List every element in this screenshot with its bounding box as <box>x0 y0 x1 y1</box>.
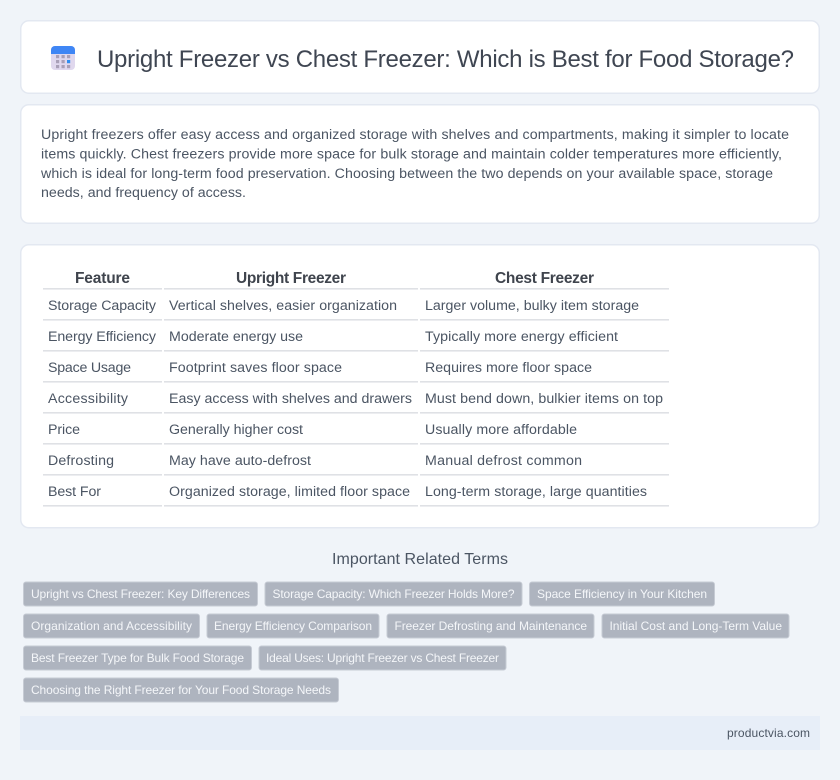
tag <box>265 582 522 606</box>
tag: Ideal Uses: Upright Freezer vs Chest Freezer <box>266 651 499 665</box>
table header: Chest Freezer <box>495 270 594 287</box>
row: storage capacity: Storage Capacity <box>48 298 157 314</box>
tag: Upright vs Chest Freezer: Key Differences <box>31 587 250 601</box>
tag: Best Freezer Type for Bulk Food Storage <box>31 651 244 665</box>
row: storage capacity <box>48 298 639 314</box>
tag <box>24 678 338 702</box>
title: Upright Freezer vs Chest Freezer: Which is Best for Food Storage? <box>97 46 794 73</box>
intro text: which is ideal for long-term food preservation. Choosing between the two depends on your available space, storage <box>40 166 773 182</box>
row: storage capacity: Vertical shelves, easier organization <box>169 298 397 314</box>
row: energy efficiency: Moderate energy use <box>169 329 303 345</box>
row: energy efficiency <box>48 329 618 345</box>
row: space usage: Requires more floor space <box>425 360 592 376</box>
tag: Energy Efficiency Comparison <box>214 619 372 633</box>
tag: Initial Cost and Long-Term Value <box>610 619 782 633</box>
row: defrosting: Defrosting <box>48 453 114 469</box>
intro text: items quickly. Chest freezers provide more space for bulk storage and maintain colder temperatures more efficiently, <box>41 146 782 162</box>
row: accessibility: Easy access with shelves and drawers <box>169 391 412 407</box>
row: defrosting: Manual defrost common <box>425 453 582 469</box>
tag <box>530 582 714 606</box>
table header: Feature <box>75 270 130 287</box>
tag: Organization and Accessibility <box>31 619 192 633</box>
row: space usage: Footprint saves floor space <box>169 360 342 376</box>
tag <box>24 646 252 670</box>
tag: Space Efficiency in Your Kitchen <box>537 587 707 601</box>
intro text: Upright freezers offer easy access and organized storage with shelves and compartments, making it simpler to locate <box>41 127 789 143</box>
table header <box>75 270 594 287</box>
tag <box>387 614 594 638</box>
tag <box>602 614 789 638</box>
row: storage capacity: Larger volume, bulky item storage <box>425 298 639 314</box>
tag: Choosing the Right Freezer for Your Food Storage Needs <box>31 683 331 697</box>
table rules <box>43 288 669 507</box>
row: accessibility: Accessibility <box>48 391 129 407</box>
footer source: productvia.com <box>727 726 810 740</box>
row: price: Usually more affordable <box>425 422 577 438</box>
row: energy efficiency: Typically more energy efficient <box>425 329 618 345</box>
row: defrosting: May have auto-defrost <box>169 453 311 469</box>
icon: calendar grid <box>51 46 75 70</box>
row: best for: Organized storage, limited floor space <box>169 484 410 500</box>
tag <box>24 582 258 606</box>
panel: intro paragraph <box>21 105 819 223</box>
panel: title header <box>21 21 819 93</box>
row: best for <box>48 484 647 500</box>
row: energy efficiency: Energy Efficiency <box>48 329 157 345</box>
tag: Storage Capacity: Which Freezer Holds More? <box>272 587 515 601</box>
row: space usage <box>48 360 592 376</box>
tag <box>24 614 200 638</box>
row: defrosting <box>48 453 582 469</box>
row: best for: Long-term storage, large quantities <box>425 484 647 500</box>
row: space usage: Space Usage <box>48 360 131 376</box>
row: accessibility: Must bend down, bulkier items on top <box>425 391 663 407</box>
tag <box>207 614 379 638</box>
table header: Upright Freezer <box>236 270 346 287</box>
heading: related terms: Important Related Terms <box>332 551 508 568</box>
tag: Freezer Defrosting and Maintenance <box>394 619 587 633</box>
panel: comparison table <box>21 245 819 528</box>
intro text <box>40 127 789 201</box>
intro text: needs, and frequency of access. <box>41 185 246 201</box>
related term tags <box>24 582 789 702</box>
row: price: Price <box>48 422 80 438</box>
row: price: Generally higher cost <box>169 422 303 438</box>
tag <box>259 646 506 670</box>
row: price <box>48 422 577 438</box>
row: accessibility <box>48 391 663 407</box>
row: best for: Best For <box>48 484 101 500</box>
footer bar <box>20 716 820 750</box>
